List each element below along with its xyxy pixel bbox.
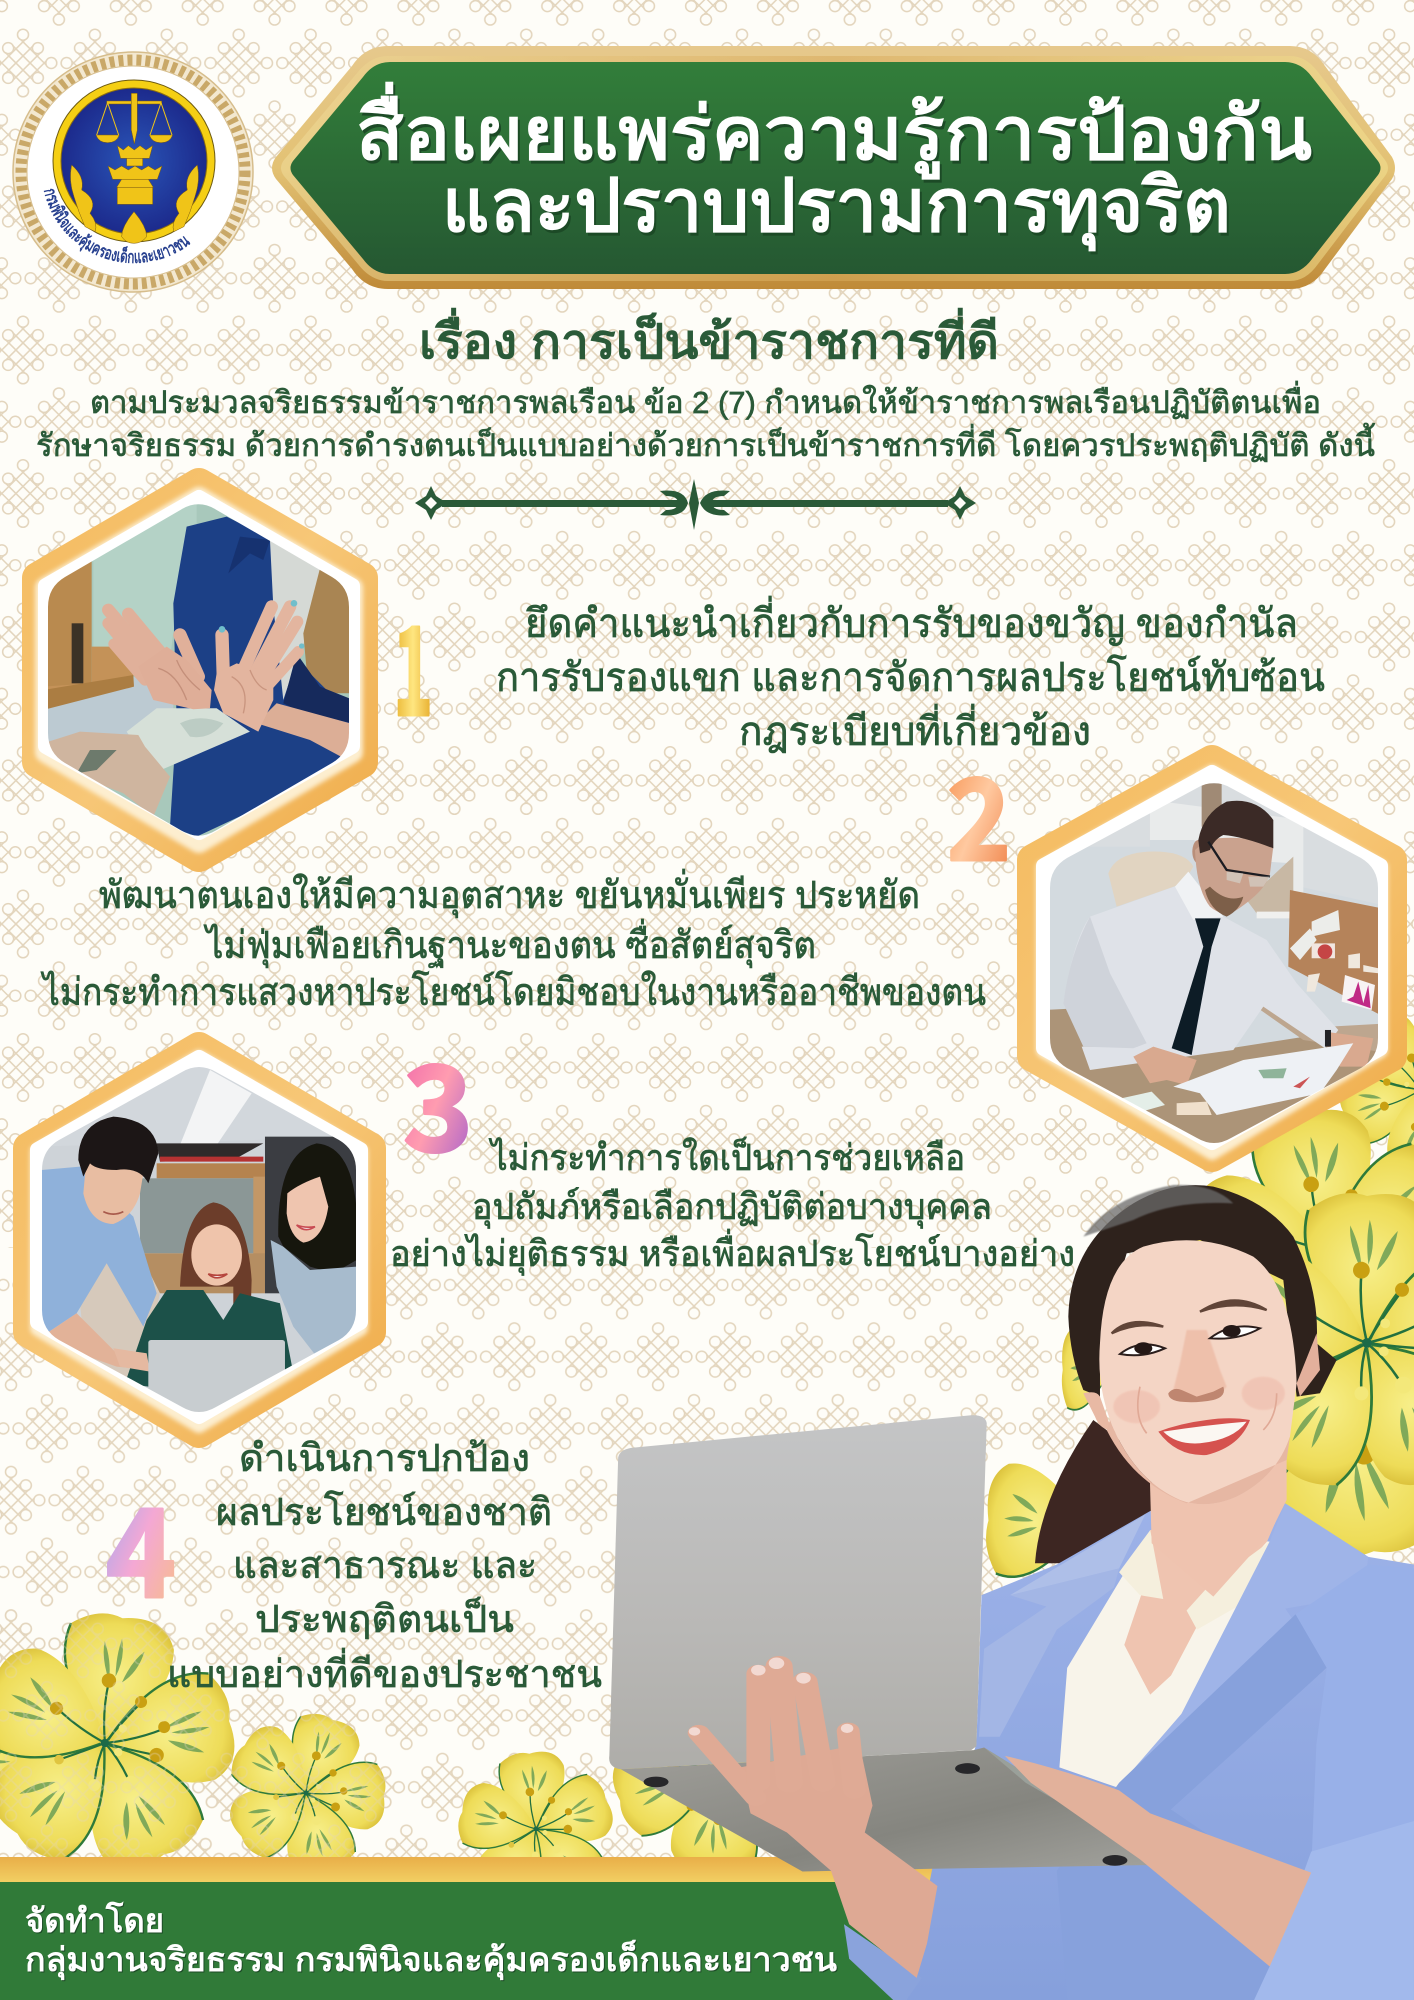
right hand (on laptop base) and forearm (609, 1415, 1311, 1978)
photo frame 2 (1033, 761, 1391, 1156)
item 1 text: การรับรองแขก และการจัดการผลประโยชน์ทับซ้อน (496, 655, 1325, 700)
item 1 text (496, 596, 1325, 754)
panel: item 2 (40, 731, 1391, 1156)
item 3 text (390, 1135, 1075, 1276)
left hand (108, 610, 198, 680)
eyebrows and eyes (1112, 1300, 1267, 1355)
title text: สื่อเผยแพร่ความรู้การป้องกัน (356, 81, 1312, 180)
panel: item 3 (29, 1014, 1075, 1460)
item 4 text: ผลประโยชน์ของชาติ (216, 1490, 552, 1534)
title text (356, 81, 1312, 252)
photo: man reading documents (1043, 777, 1390, 1153)
item 1 text: ยึดคำแนะนำเกี่ยวกับการรับของขวัญ ของกำนัล (525, 596, 1298, 646)
laptop base (621, 1747, 1158, 1871)
jacket and shirt (844, 1500, 1414, 2000)
item 2 text: ไม่กระทำการแสวงหาประโยชน์โดยมิชอบในงานหรืออาชีพของตน (40, 970, 986, 1014)
item 2 text: พัฒนาตนเองให้มีความอุตสาหะ ขยันหมั่นเพียร ประหยัด (99, 869, 920, 918)
footer text (25, 1901, 837, 1981)
title banner (272, 46, 1395, 289)
footer band (0, 1857, 940, 2000)
photo frame 1 (38, 484, 362, 856)
logo: Department of Juvenile Observation and Protection seal (12, 51, 254, 293)
intro paragraph: รักษาจริยธรรม ด้วยการดำรงตนเป็นแบบอย่างด้วยการเป็นข้าราชการที่ดี โดยควรประพฤติปฏิบัติ ดังนี้ (36, 423, 1375, 463)
item 4 text: และสาธารณะ และ (233, 1545, 537, 1587)
item 4 text: แบบอย่างที่ดีของประชาชน (167, 1648, 602, 1696)
item 3 text: ไม่กระทำการใดเป็นการช่วยเหลือ (488, 1135, 965, 1178)
woman holding laptop (609, 1185, 1414, 2000)
logo: Department of Juvenile Observation and Protection seal: กรมพินิจและคุ้มครองเด็กและเยาวชน (44, 188, 190, 264)
item 4 text (167, 1438, 602, 1696)
item 2 text (40, 869, 986, 1014)
left hand holding laptop (689, 1658, 937, 1978)
ponytail and hair back (1035, 1420, 1157, 1563)
item 2 text: ไม่ฟุ่มเฟือยเกินฐานะของตน ซื่อสัตย์สุจริต (203, 919, 816, 968)
item 4 text: ดำเนินการปกป้อง (239, 1438, 530, 1480)
neck, face and hair (1068, 1185, 1337, 1597)
title text: และปราบปรามการทุจริต (442, 164, 1231, 252)
item 1 text: กฎระเบียบที่เกี่ยวข้อง (739, 704, 1091, 754)
intro paragraph (36, 381, 1375, 463)
footer text: จัดทำโดย (25, 1901, 164, 1939)
item 3 text: อุปถัมภ์หรือเลือกปฏิบัติต่อบางบุคคล (472, 1186, 992, 1229)
laptop lid (609, 1415, 987, 1769)
subtitle: เรื่อง การเป็นข้าราชการที่ดี (419, 307, 999, 369)
item 3 text: อย่างไม่ยุติธรรม หรือเพื่อผลประโยชน์บางอย่าง (390, 1229, 1075, 1276)
intro paragraph: ตามประมวลจริยธรรมข้าราชการพลเรือน ข้อ 2 (7) กำหนดให้ข้าราชการพลเรือนปฏิบัติตนเพื่อ (90, 381, 1321, 420)
number 1: 1 (393, 574, 433, 751)
ornamental divider (415, 479, 976, 530)
number 2: 2 (947, 731, 1011, 893)
number 4: 4 (106, 1456, 176, 1633)
photo: hands refusing money (43, 500, 360, 840)
smile (1158, 1418, 1250, 1455)
photo: three colleagues at a laptop (42, 1067, 356, 1412)
right hand (222, 607, 298, 687)
item 4 text: ประพฤติตนเป็น (255, 1596, 514, 1641)
flowers: right side (985, 979, 1414, 1592)
panel: item 1 (38, 484, 1325, 856)
flowers: bottom left (0, 1597, 825, 1918)
photo frame 3 (29, 1048, 370, 1432)
footer text: กลุ่มงานจริยธรรม กรมพินิจและคุ้มครองเด็กและเยาวชน (25, 1939, 837, 1981)
number 3: 3 (403, 1014, 473, 1185)
panel: item 4 (106, 1438, 602, 1696)
